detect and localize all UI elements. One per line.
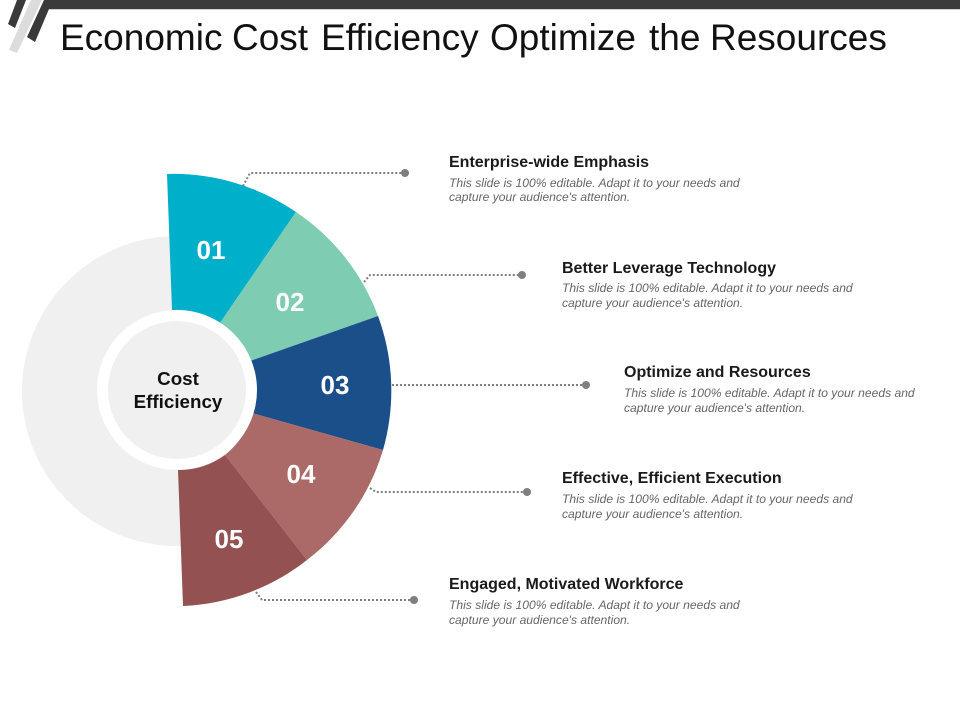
- text block 03: Optimize and Resources: [624, 364, 811, 381]
- text block 01: [449, 154, 741, 204]
- segment 03: 03: [321, 370, 349, 400]
- text block 04: Effective, Efficient Execution: [562, 470, 782, 487]
- text block 02: [562, 260, 854, 310]
- text block 03: capture your audience's attention.: [624, 401, 805, 415]
- segment 04: 04: [287, 459, 316, 489]
- connector 01: [243, 169, 409, 186]
- connector 02: [364, 271, 526, 282]
- text block 03: [624, 364, 916, 415]
- text block 05: Engaged, Motivated Workforce: [449, 576, 684, 593]
- connector 04: [370, 488, 531, 496]
- centre circle: Cost Efficiency: [97, 310, 257, 470]
- centre circle: Cost Efficiency: Cost: [157, 368, 200, 389]
- header bar with slanted stripes: [8, 0, 960, 53]
- title: the: [649, 17, 700, 58]
- text block 03: This slide is 100% editable. Adapt it to your needs and: [624, 386, 916, 400]
- text block 05: [449, 576, 741, 627]
- text block 05: capture your audience's attention.: [449, 613, 630, 627]
- segment 02: [220, 212, 378, 361]
- segment 05: 05: [215, 524, 243, 554]
- segment 05: [178, 455, 307, 606]
- text block 04: capture your audience's attention.: [562, 507, 743, 521]
- connector 03: [392, 381, 590, 389]
- text block 02: capture your audience's attention.: [562, 296, 743, 310]
- text block 02: Better Leverage Technology: [562, 260, 776, 277]
- title: Resources: [710, 17, 887, 58]
- text block 01: This slide is 100% editable. Adapt it to your needs and: [449, 176, 741, 190]
- text block 05: This slide is 100% editable. Adapt it to your needs and: [449, 598, 741, 612]
- segment 04: [225, 413, 383, 560]
- text block 01: capture your audience's attention.: [449, 190, 630, 204]
- semicircular segmented diagram: [167, 174, 391, 606]
- segment 01: [167, 174, 296, 323]
- segment 03: [250, 316, 391, 450]
- title: Cost: [232, 17, 309, 58]
- segment 02: 02: [276, 287, 304, 317]
- segment 01: 01: [197, 235, 225, 265]
- title: Efficiency: [321, 17, 479, 58]
- title: Optimize: [490, 17, 636, 58]
- title: Economic: [60, 17, 222, 58]
- text block 04: This slide is 100% editable. Adapt it to your needs and: [562, 492, 854, 506]
- text block 04: [562, 470, 854, 521]
- centre circle: Cost Efficiency: Efficiency: [134, 391, 223, 412]
- text block 01: Enterprise-wide Emphasis: [449, 154, 649, 171]
- text block 02: This slide is 100% editable. Adapt it to your needs and: [562, 281, 854, 295]
- connector 05: [256, 592, 418, 604]
- background grey circle: [22, 236, 332, 546]
